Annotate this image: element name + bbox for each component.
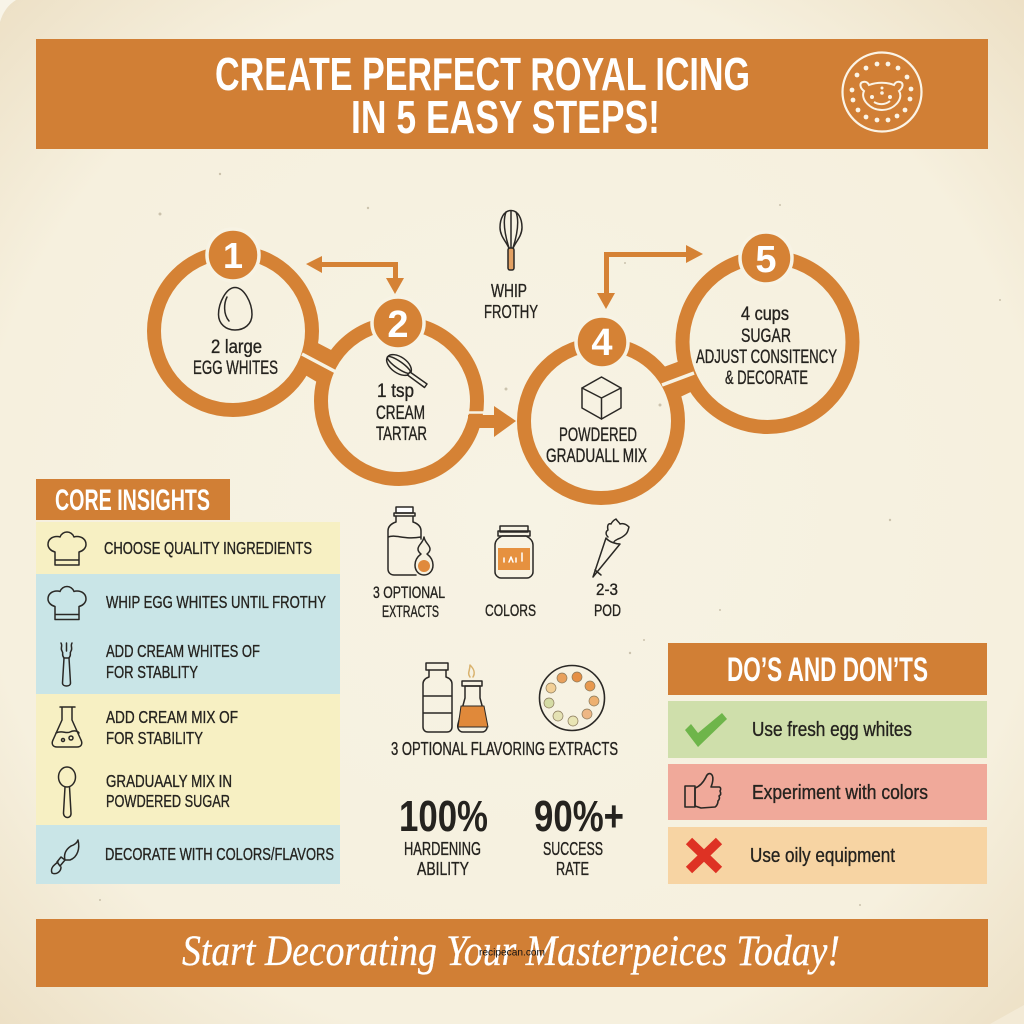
arrow: step 2 to step 4 — [467, 406, 516, 437]
icon: egg — [218, 288, 252, 330]
step 1 label: EGG WHITES — [193, 358, 278, 379]
icon: green check — [685, 713, 727, 747]
arrow: between steps 1 and 2 — [306, 256, 404, 294]
insight: add cream mix — [106, 707, 238, 748]
icon: color jar — [495, 526, 533, 578]
icon: sugar cube — [582, 377, 621, 419]
icon: paint brush — [51, 840, 79, 874]
do's and don'ts heading: DO’S AND DON’TS — [727, 651, 928, 689]
step 2 label: CREAM — [376, 403, 425, 424]
watermark: recipecan.com — [479, 946, 545, 958]
step 4 label — [546, 425, 647, 467]
footer call to action: Start Decorating Your Masterpeices Today! — [182, 928, 840, 975]
flavoring extracts group — [391, 663, 618, 759]
stat: success rate: SUCCESS — [543, 839, 603, 859]
icon: tall bottle — [423, 663, 452, 732]
step 2 label — [376, 381, 427, 445]
arrow: between steps 4 and 5 — [597, 245, 703, 309]
icon: chef hat 2 — [48, 586, 86, 620]
step 5 circle — [682, 232, 852, 427]
step 4 label: GRADUALL MIX — [546, 446, 647, 467]
row: experiment with colors: Experiment with colors — [752, 782, 928, 804]
icon: chef hat — [48, 532, 86, 565]
do's and don'ts heading — [668, 643, 987, 695]
step 4 badge — [576, 316, 628, 368]
whip frothy label: FROTHY — [484, 302, 538, 322]
icon: red cross — [689, 841, 719, 870]
icon: spoon — [58, 767, 76, 818]
row: oily equipment — [668, 827, 987, 884]
step 5 label: 4 cups — [741, 304, 789, 325]
extracts label — [373, 583, 445, 621]
connector: step 4 to 5 — [661, 361, 695, 398]
step 5 badge: 5 — [755, 239, 777, 281]
icon: orange flask — [458, 665, 488, 732]
step 2 label: 1 tsp — [377, 381, 414, 402]
whip frothy label — [484, 281, 538, 322]
row: fresh egg whites: Use fresh egg whites — [752, 719, 912, 741]
step 1 circle — [154, 229, 312, 410]
footer banner — [36, 919, 988, 987]
pod label — [594, 580, 621, 620]
step 5 badge — [740, 232, 792, 284]
panel: core insights — [36, 479, 340, 884]
whip frothy note — [484, 210, 538, 322]
step 1 label: 2 large — [211, 337, 262, 358]
title text — [215, 48, 750, 143]
extracts label: 3 OPTIONAL — [373, 583, 445, 602]
insight: gradually mix: GRADUAALY MIX IN — [106, 771, 232, 791]
insight: add cream whites — [106, 641, 260, 682]
flavoring extracts label: 3 OPTIONAL FLAVORING EXTRACTS — [391, 739, 618, 759]
step 4 label: POWDERED — [559, 425, 637, 446]
stat: hardening ability: ABILITY — [417, 859, 469, 879]
icon: frothing fork — [61, 643, 72, 686]
step 5 label: & DECORATE — [725, 368, 808, 389]
icon: extract bottle with drop — [388, 507, 433, 575]
core insights heading: CORE INSIGHTS — [55, 484, 210, 517]
whip frothy label: WHIP — [491, 281, 527, 301]
step 5 label — [696, 304, 837, 389]
step 1 badge — [207, 229, 259, 281]
step 4 circle — [524, 316, 695, 498]
icon: small whisk — [383, 350, 427, 388]
step 4 badge: 4 — [591, 322, 613, 364]
insight: gradually mix: POWDERED SUGAR — [106, 791, 230, 811]
insight: choose quality ingredients: CHOOSE QUALITY INGREDIENTS — [104, 538, 312, 558]
colors label: COLORS — [485, 601, 536, 620]
insight: add cream whites: FOR STABLITY — [106, 662, 198, 682]
row: fresh egg whites — [668, 701, 987, 758]
step 2 badge: 2 — [387, 304, 409, 346]
extracts label: EXTRACTS — [382, 602, 439, 621]
stat: success rate: RATE — [556, 859, 589, 879]
step 2 badge — [372, 297, 424, 349]
core insights heading — [36, 479, 230, 520]
pod label: 2-3 — [596, 580, 618, 599]
step 1 badge: 1 — [223, 235, 243, 276]
optional items row — [373, 507, 629, 621]
insight: add cream whites: ADD CREAM WHITES OF — [106, 641, 260, 661]
icon: thumbs up — [685, 774, 721, 808]
insight: whip egg whites: WHIP EGG WHITES UNTIL FROTHY — [106, 592, 326, 612]
insight: decorate: DECORATE WITH COLORS/FLAVORS — [105, 844, 334, 864]
step 5 label: SUGAR — [741, 326, 791, 347]
row: oily equipment: Use oily equipment — [750, 845, 895, 867]
step 2 label: TARTAR — [376, 424, 427, 445]
step 1 label — [193, 337, 278, 379]
insight row backgrounds — [36, 522, 340, 884]
stat: hardening ability — [399, 792, 488, 879]
title banner — [36, 39, 988, 149]
panel: do's and don'ts — [668, 643, 987, 884]
step 5 label: ADJUST CONSITENCY — [696, 347, 837, 368]
insight: add cream mix: FOR STABILITY — [106, 728, 203, 748]
stat: hardening ability: 100% — [399, 792, 488, 841]
icon: piping bag — [593, 519, 629, 577]
icon: cookie face logo — [842, 52, 922, 132]
title text: CREATE PERFECT ROYAL ICING — [215, 48, 750, 100]
title text: IN 5 EASY STEPS! — [351, 91, 660, 143]
stat: success rate — [534, 792, 624, 879]
step 2 circle — [300, 297, 477, 479]
pod label: POD — [594, 601, 621, 620]
row: experiment with colors — [668, 764, 987, 820]
icon: flask — [52, 707, 82, 747]
insight: add cream mix: ADD CREAM MIX OF — [106, 707, 238, 727]
icon: paint palette — [540, 666, 604, 730]
connector: step 1 to 2 — [300, 340, 336, 385]
stat: hardening ability: HARDENING — [404, 839, 481, 859]
insight: gradually mix — [106, 771, 232, 811]
stat: success rate: 90%+ — [534, 792, 624, 841]
icon: whisk — [500, 210, 522, 270]
